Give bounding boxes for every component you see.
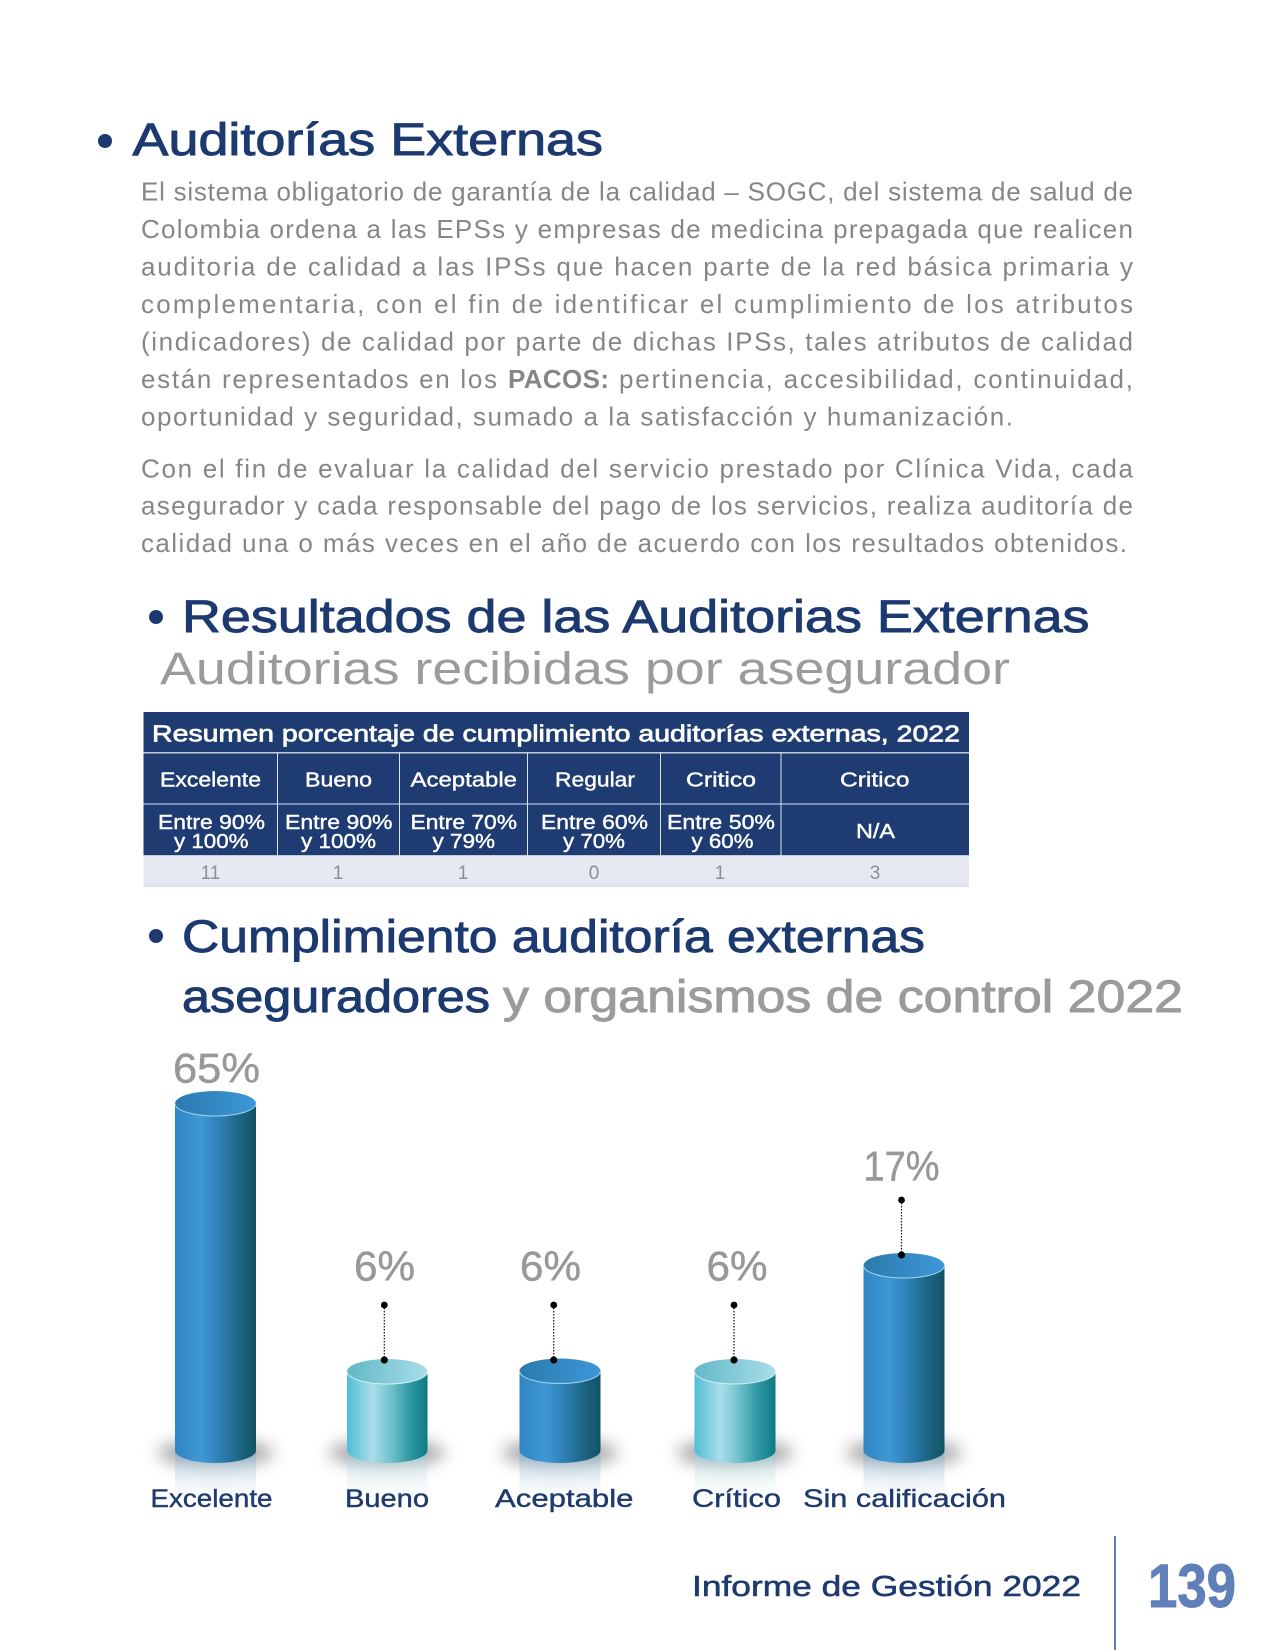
heading: Cumplimiento auditoría externas aseguradores y organismos de control 2022: y organismos de control 2022 xyxy=(503,971,1183,1022)
bar: Excelente 65% xyxy=(158,1044,274,1502)
heading: Cumplimiento auditoría externas aseguradores y organismos de control 2022: aseguradores xyxy=(182,971,490,1022)
table ranges row: Entre 90% xyxy=(285,812,393,834)
text block: SOGC paragraph: complementaria, con el fin de identificar el cumplimiento de los atributos xyxy=(141,289,1133,319)
table header row xyxy=(160,770,910,792)
heading: Cumplimiento auditoría externas aseguradores y organismos de control 2022: Cumplimiento auditoría externas xyxy=(182,911,925,962)
table values row: 3 xyxy=(870,863,880,884)
bar: Crítico 6% xyxy=(677,1242,793,1502)
text block: evaluation paragraph: Con el fin de evaluar la calidad del servicio prestado por Clínica Vida, cada xyxy=(141,454,1134,484)
bar: Excelente 65%: 65% xyxy=(173,1044,260,1092)
footer: report name: Informe de Gestión 2022 xyxy=(692,1571,1081,1603)
bar: Sin calificación 17% xyxy=(846,1142,962,1502)
table ranges row: y 100% xyxy=(174,831,249,853)
category labels xyxy=(150,1485,1006,1513)
table values row: 1 xyxy=(333,863,343,884)
text block: SOGC paragraph: pertinencia, accesibilidad, continuidad, xyxy=(619,364,1133,394)
text block: evaluation paragraph: calidad una o más veces en el año de acuerdo con los resultados obtenidos. xyxy=(141,528,1127,558)
table header row: Aceptable xyxy=(410,770,517,792)
table ranges row: y 100% xyxy=(301,831,376,853)
table ranges row xyxy=(158,812,896,853)
table ranges row: Entre 60% xyxy=(541,812,648,834)
table ranges row: Entre 50% xyxy=(667,812,775,834)
bar chart: cumplimiento xyxy=(150,1044,1006,1513)
text block: SOGC paragraph: El sistema obligatorio de garantía de la calidad – SOGC, del sistema de salud de xyxy=(141,176,1133,206)
category labels: Aceptable xyxy=(495,1485,634,1513)
table header row: Critico xyxy=(686,770,756,792)
table ranges row: y 60% xyxy=(692,831,754,853)
bar: Bueno 6% xyxy=(329,1242,445,1502)
bar: Bueno 6%: 6% xyxy=(354,1242,415,1290)
table values row: 11 xyxy=(201,863,220,884)
category labels: Crítico xyxy=(692,1485,781,1513)
text block: SOGC paragraph: (indicadores) de calidad por parte de dichas IPSs, tales atributos de calidad xyxy=(141,326,1133,356)
table values row: 1 xyxy=(715,863,725,884)
footer: page number: 139 xyxy=(1148,1552,1236,1620)
category labels: Excelente xyxy=(150,1485,272,1513)
text block: evaluation paragraph xyxy=(141,454,1134,558)
bar: Aceptable 6%: 6% xyxy=(520,1242,581,1290)
table values row xyxy=(201,863,880,884)
table ranges row: N/A xyxy=(856,821,896,843)
table values row: 0 xyxy=(589,863,599,884)
text block: SOGC paragraph: están representados en los xyxy=(141,364,497,394)
text block: evaluation paragraph: asegurador y cada responsable del pago de los servicios, realiza auditoría de xyxy=(141,490,1133,520)
text block: SOGC paragraph: PACOS: xyxy=(508,364,609,394)
text block: SOGC paragraph xyxy=(141,176,1133,432)
text block: SOGC paragraph: oportunidad y seguridad, sumado a la satisfacción y humanización. xyxy=(141,402,1013,432)
table ranges row: y 79% xyxy=(432,831,495,853)
category labels: Bueno xyxy=(345,1485,429,1513)
table ranges row: Entre 90% xyxy=(158,812,265,834)
heading: Cumplimiento auditoría externas aseguradores y organismos de control 2022 xyxy=(149,911,1183,1022)
footer: page number xyxy=(1114,1536,1236,1650)
bar: Crítico 6%: 6% xyxy=(706,1242,768,1290)
table header row: Bueno xyxy=(305,770,372,792)
heading: Auditorías Externas: Auditorías Externas xyxy=(132,114,603,165)
table values row: 1 xyxy=(458,863,468,884)
text block: SOGC paragraph: auditoria de calidad a las IPSs que hacen parte de la red básica primaria y xyxy=(141,252,1133,282)
table header row: Regular xyxy=(555,770,635,792)
table header row: Excelente xyxy=(160,770,261,792)
table ranges row: y 70% xyxy=(563,831,625,853)
heading: Resultados de las Auditorias Externas: Resultados de las Auditorias Externas xyxy=(182,591,1090,642)
table title: Resumen porcentaje de cumplimiento auditorías externas, 2022 xyxy=(152,720,960,746)
subheading: Auditorias recibidas por asegurador: Auditorias recibidas por asegurador xyxy=(160,643,1010,694)
table: resumen cumplimiento xyxy=(144,712,969,887)
category labels: Sin calificación xyxy=(803,1485,1006,1513)
bar: Sin calificación 17%: 17% xyxy=(864,1142,940,1190)
text block: SOGC paragraph: Colombia ordena a las EPSs y empresas de medicina prepagada que realicen xyxy=(141,214,1133,244)
bar: Aceptable 6% xyxy=(502,1242,618,1502)
table ranges row: Entre 70% xyxy=(410,812,517,834)
table header row: Critico xyxy=(840,770,910,792)
